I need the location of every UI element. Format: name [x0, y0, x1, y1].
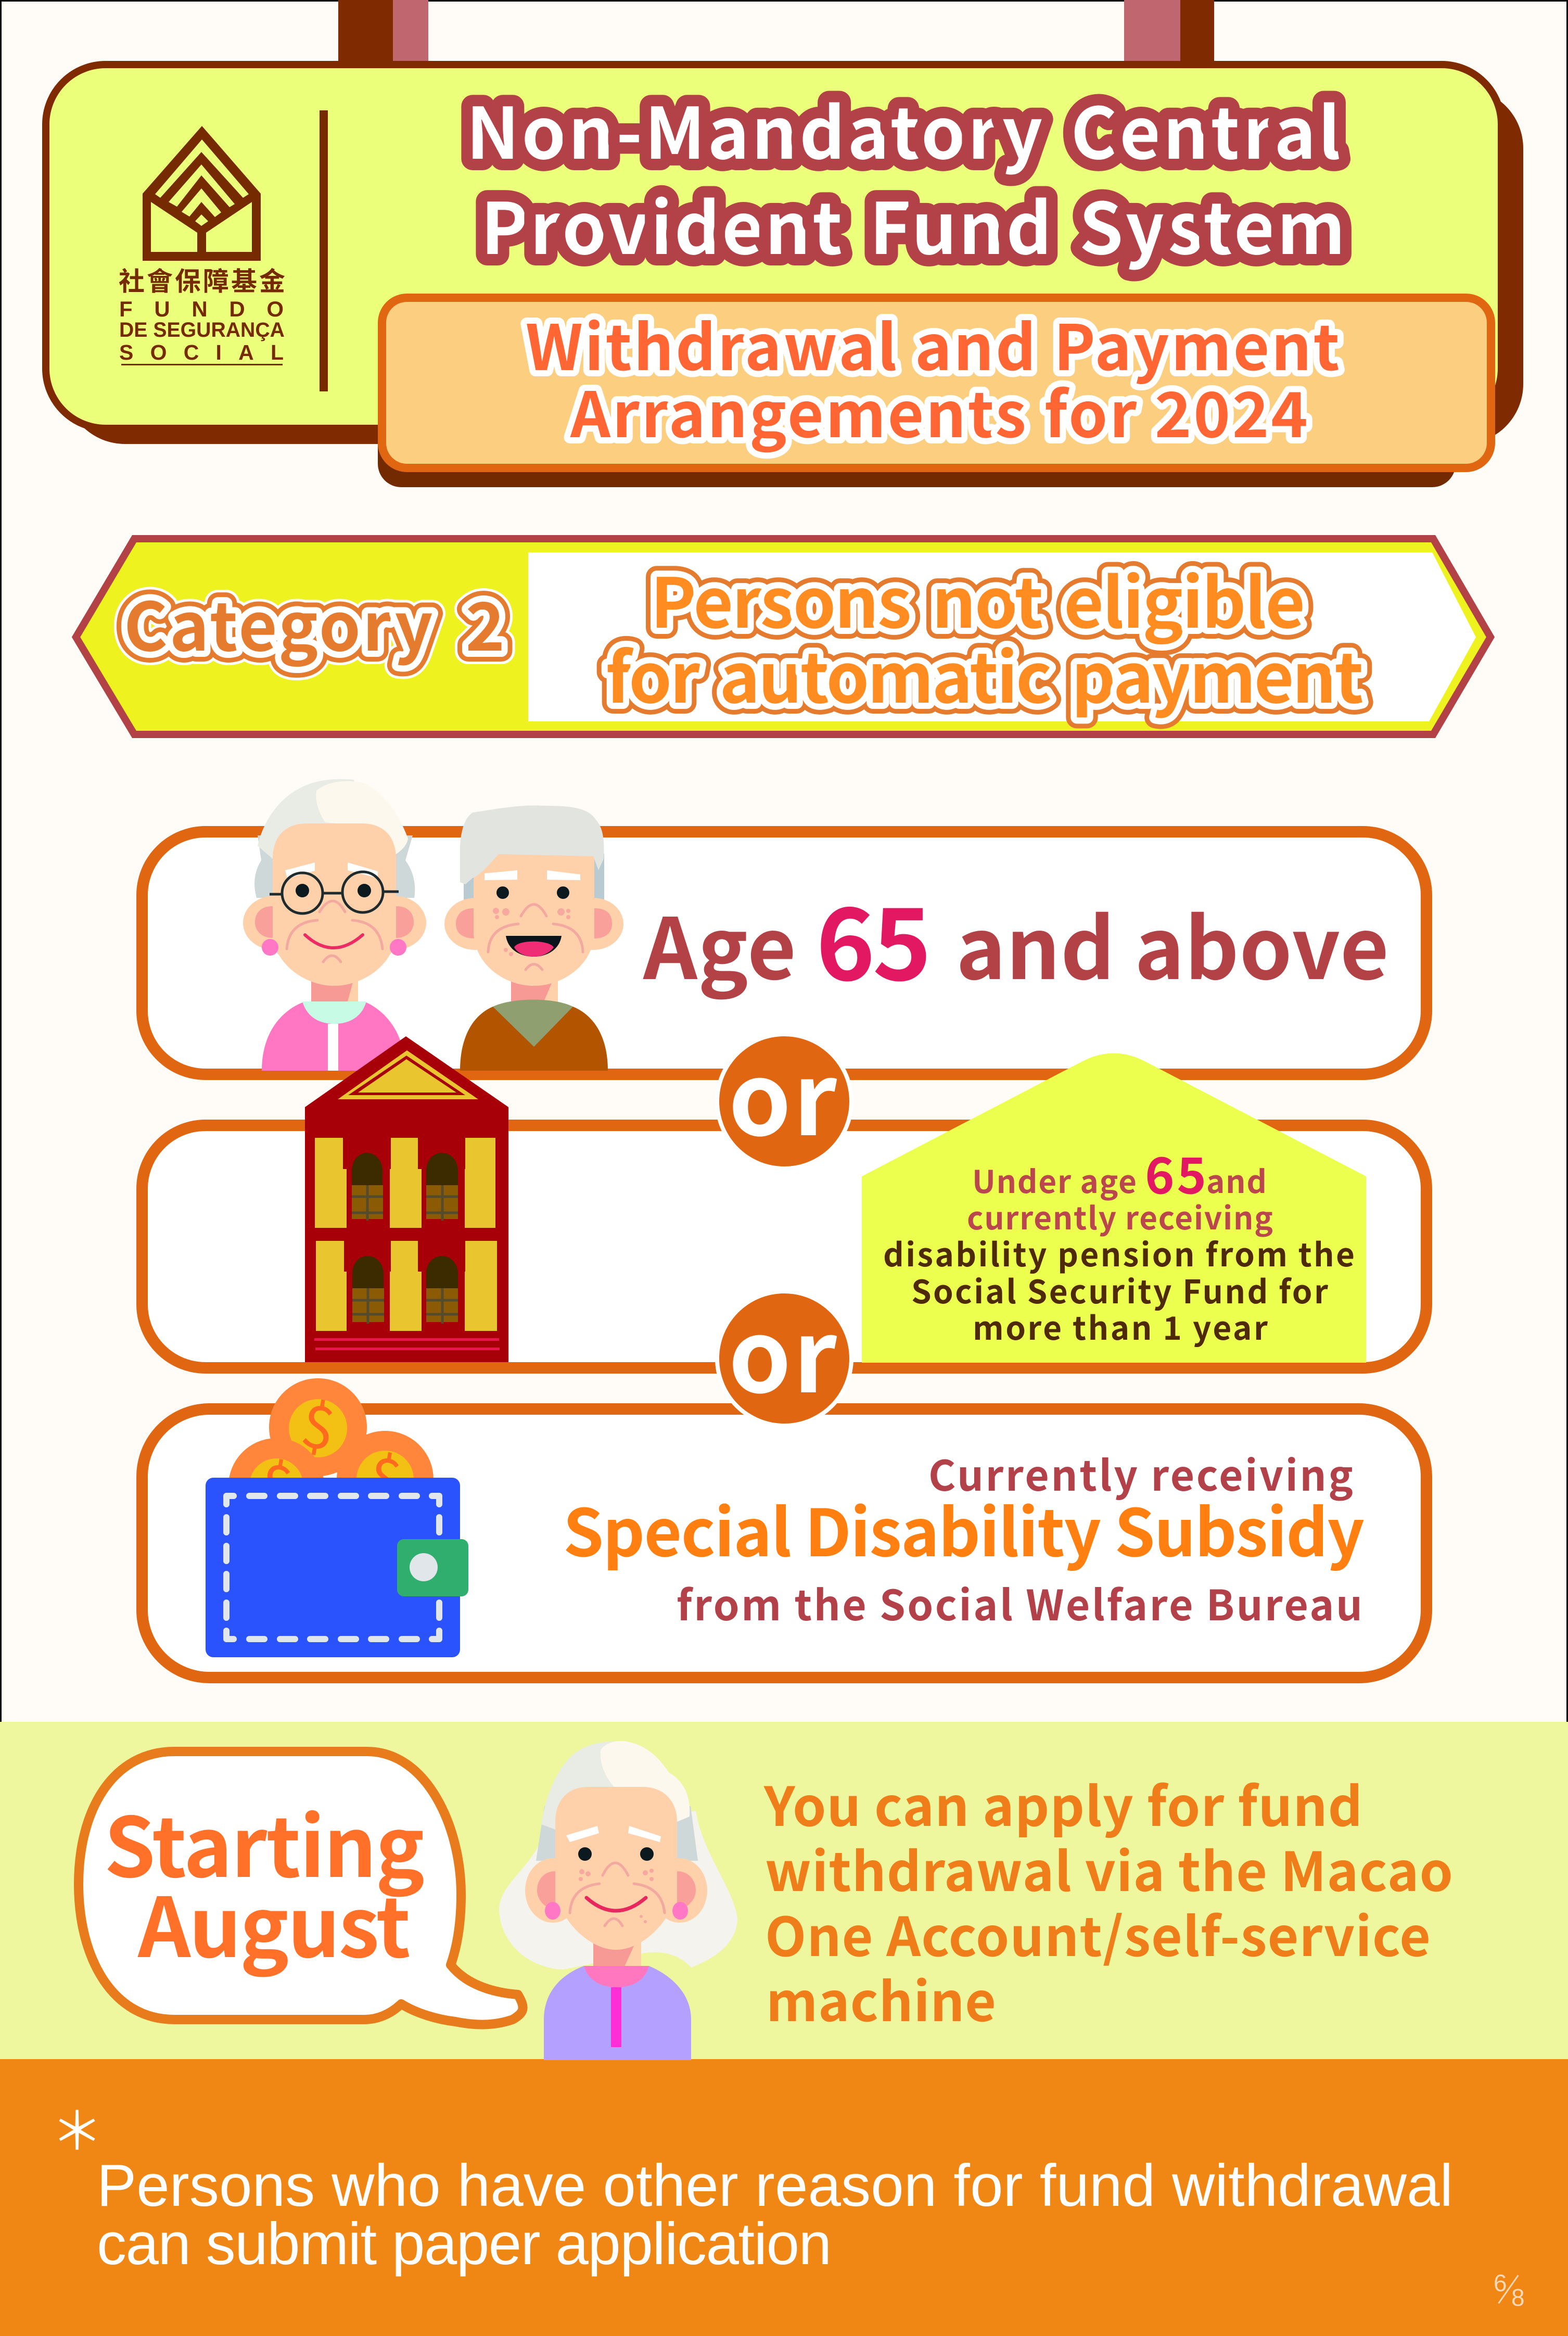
panel: subtitle — [378, 298, 1491, 487]
icon: elderly woman with glasses — [243, 779, 426, 1071]
logo: Social Security Fund — [119, 126, 285, 365]
title — [466, 77, 1345, 275]
category description: Persons not eligible — [651, 549, 1305, 648]
icon: elderly man — [444, 805, 623, 1071]
icon: emblem — [143, 126, 261, 261]
panel: footnote band — [0, 1966, 1568, 2336]
text: Starting August — [104, 1782, 425, 1981]
text: subsidy description: from the Social Welfare Bureau — [677, 1572, 1362, 1633]
subtitle text — [526, 298, 1340, 455]
text: Age 65 and above — [643, 865, 1389, 1009]
text: subsidy description: Special Disability Subsidy — [563, 1481, 1365, 1575]
text: how to apply: withdrawal via the Macao — [765, 1829, 1453, 1907]
text: how to apply: One Account/self-service — [765, 1894, 1431, 1972]
logo wordmark: SOCIAL — [119, 340, 284, 364]
category label: Category 2 — [124, 574, 505, 670]
subtitle text: Withdrawal and Payment — [526, 298, 1340, 388]
category description — [606, 549, 1363, 723]
text: subsidy description — [563, 1443, 1365, 1633]
text: disability pension: Social Security Fund for — [911, 1266, 1329, 1313]
icon: wallet with coins: $ — [296, 1379, 342, 1467]
text: disability pension: more than 1 year — [973, 1302, 1268, 1349]
panel: special disability subsidy row — [142, 1409, 1426, 1678]
page number: 6 — [1494, 2269, 1507, 2296]
logo wordmark: DE SEGURANÇA — [119, 319, 285, 341]
category label: Category 2 — [124, 574, 505, 670]
text: Starting August: Starting — [104, 1782, 425, 1901]
title: Provident Fund System — [481, 172, 1345, 275]
speech bubble — [79, 1751, 523, 2025]
icon: wallet with coins: $ — [363, 1432, 408, 1518]
category description: for automatic payment — [606, 624, 1363, 723]
panel: application band — [0, 1722, 1568, 2059]
text: under age 65: currently receiving — [967, 1194, 1273, 1239]
text: Age 65 and above: Age — [643, 881, 796, 1004]
text: under age 65: Under age — [972, 1157, 1137, 1202]
text: how to apply: You can apply for fund — [763, 1764, 1362, 1842]
footnote asterisk: ＊ — [51, 2089, 103, 2165]
text: Age 65 and above: and above — [956, 881, 1389, 1004]
category label: Category 2 — [124, 574, 505, 670]
icon: wallet with coins — [206, 1378, 468, 1657]
text: Starting August: August — [137, 1862, 411, 1981]
elderly woman body — [544, 1966, 691, 2060]
icon: red heritage building — [305, 1036, 508, 1362]
panel: disability pension row — [142, 1125, 1426, 1368]
page number — [1494, 2269, 1525, 2311]
title: Non-Mandatory Central — [466, 77, 1341, 180]
text: disability pension — [883, 1229, 1355, 1349]
text: under age 65: 65 — [1145, 1136, 1206, 1208]
logo wordmark: 社會保障基金 — [119, 261, 285, 298]
subtitle text: Arrangements for 2024 — [570, 365, 1308, 455]
badge: or: or — [729, 1020, 837, 1164]
text: disability pension: disability pension from the — [883, 1229, 1355, 1276]
category description: for automatic payment — [606, 624, 1363, 723]
text: how to apply: machine — [766, 1959, 996, 2037]
footnote text — [97, 2153, 1453, 2277]
panel: header sign — [46, 65, 1523, 487]
badge: or: or — [729, 1277, 837, 1421]
footnote text: can submit paper application — [97, 2211, 832, 2277]
text: under age 65: and — [1206, 1157, 1267, 1202]
icon: elderly woman with long hair — [499, 1741, 737, 1970]
icon: wallet with coins: $ — [254, 1439, 299, 1525]
text: subsidy description: Currently receiving — [928, 1443, 1353, 1503]
panel: category banner — [76, 539, 1490, 734]
footnote text: Persons who have other reason for fund withdrawal — [97, 2153, 1453, 2219]
hanging straps — [338, 0, 1214, 62]
text: under age 65 — [967, 1136, 1273, 1239]
logo wordmark: FUNDO — [119, 297, 284, 321]
panel: age 65 row — [142, 832, 1426, 1074]
callout: house with pension condition — [862, 1053, 1366, 1363]
text: how to apply — [763, 1764, 1453, 2037]
page number: 8 — [1511, 2284, 1525, 2311]
text: Age 65 and above: 65 — [816, 865, 932, 1009]
logo wordmark — [119, 261, 285, 365]
category description: Persons not eligible — [651, 549, 1305, 648]
